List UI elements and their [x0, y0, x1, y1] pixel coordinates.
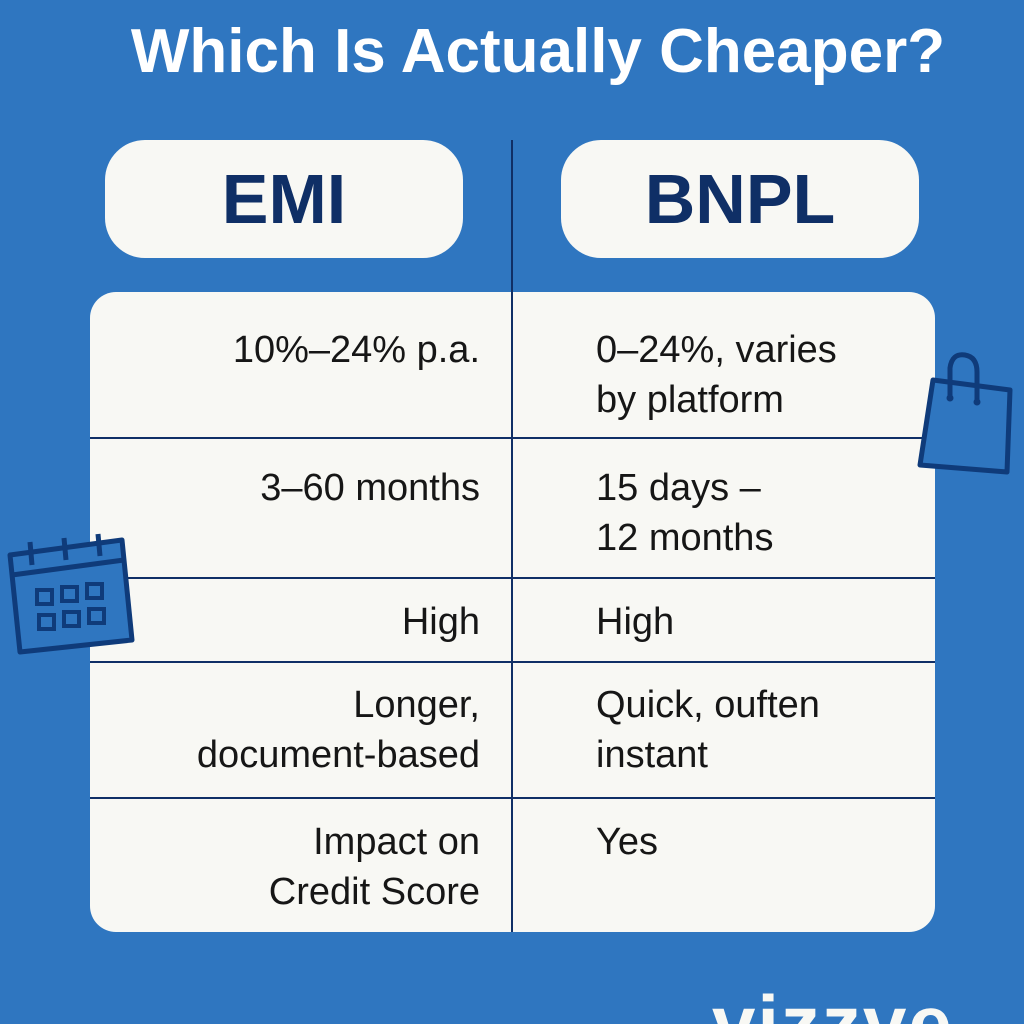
table panel	[90, 292, 935, 932]
row 3 EMI: High	[402, 601, 480, 643]
row 5 BNPL: Yes	[596, 821, 658, 863]
row 1 BNPL	[596, 329, 837, 421]
row 5 EMI	[269, 821, 480, 913]
row 5 EMI: Impact on	[313, 821, 480, 863]
pill: BNPL: BNPL	[645, 160, 835, 238]
row 4 EMI: Longer,	[353, 684, 480, 726]
row 4 EMI: document-based	[197, 734, 480, 776]
row 4 EMI	[197, 684, 480, 776]
vertical divider	[511, 140, 513, 300]
row 4 BNPL	[596, 684, 820, 776]
row 2 BNPL: 15 days –	[596, 467, 761, 509]
icon: calendar	[8, 534, 134, 654]
icon: shopping bag	[918, 352, 1012, 474]
row 5 EMI: Credit Score	[269, 871, 480, 913]
row 2 EMI: 3–60 months	[260, 467, 480, 509]
row 3 BNPL: High	[596, 601, 674, 643]
row 2 BNPL	[596, 467, 773, 559]
row 1 BNPL: by platform	[596, 379, 784, 421]
pill: EMI: EMI	[222, 160, 346, 238]
pill: EMI	[105, 140, 463, 258]
row 2 BNPL: 12 months	[596, 517, 773, 559]
pill: BNPL	[561, 140, 919, 258]
row 1 BNPL: 0–24%, varies	[596, 329, 837, 371]
title: Which Is Actually Cheaper?	[131, 17, 945, 86]
row 1 EMI: 10%–24% p.a.	[233, 329, 480, 371]
row 4 BNPL: Quick, ouften	[596, 684, 820, 726]
row 4 BNPL: instant	[596, 734, 708, 776]
